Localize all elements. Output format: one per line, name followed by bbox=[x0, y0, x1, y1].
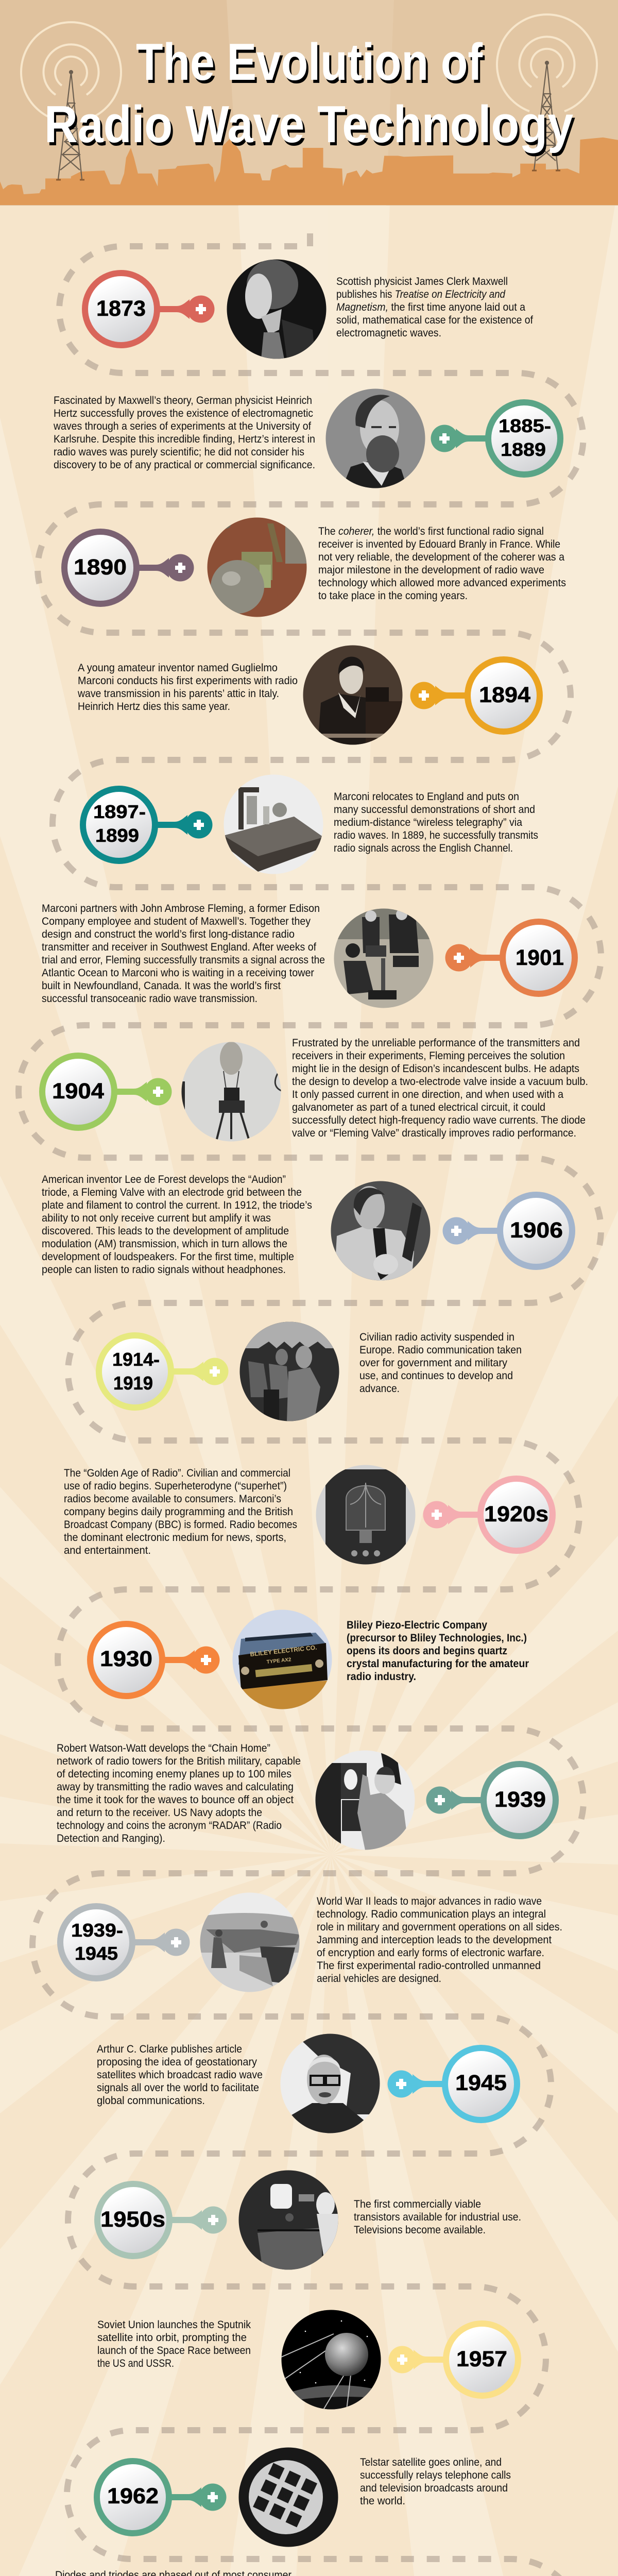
description: triode, a Fleming Valve with an electrode grid between the bbox=[42, 1187, 302, 1198]
skyline bbox=[0, 138, 618, 205]
description: the dominant electronic medium for news, sports, bbox=[64, 1532, 286, 1544]
year badge 1904 bbox=[42, 1056, 172, 1128]
photo: coherer bbox=[207, 517, 308, 617]
description: A young amateur inventor named Guglielmo bbox=[78, 662, 278, 674]
description: valve or “Fleming Valve” drastically improves radio performance. bbox=[292, 1127, 576, 1139]
year badge 1939-1945 bbox=[60, 1906, 190, 1978]
description: Magnetism, the first time anyone laid out a bbox=[336, 301, 525, 313]
description bbox=[354, 2198, 521, 2236]
description: people can listen to radio signals without headphones. bbox=[42, 1264, 286, 1276]
description: Marconi conducts his first experiments with radio bbox=[78, 675, 298, 687]
description: transistors available for industrial use. bbox=[354, 2211, 521, 2223]
panel: 1894 bbox=[77, 645, 540, 745]
icon: right radio tower bbox=[532, 61, 560, 171]
description: Europe. Radio communication taken bbox=[359, 1344, 522, 1356]
panel: 1901 bbox=[42, 903, 575, 1008]
description: radio waves. In 1889, he successfully transmits bbox=[334, 829, 538, 841]
year badge 1906: 1906 bbox=[510, 1218, 563, 1243]
description: receivers in their experiments, Fleming perceives the solution bbox=[292, 1050, 565, 1062]
panel: 1939-1945 bbox=[60, 1892, 562, 1992]
description bbox=[336, 276, 533, 339]
description: wave transmission in his parents’ attic in Italy. bbox=[77, 688, 279, 700]
description: Atlantic Ocean to Marconi who is waiting in a receiving tower bbox=[42, 967, 314, 979]
year badge 1885-1889 bbox=[431, 402, 560, 474]
description bbox=[77, 662, 298, 713]
description: American inventor Lee de Forest develops the “Audion” bbox=[42, 1174, 286, 1185]
description: and television broadcasts around bbox=[360, 2482, 508, 2494]
description: launch of the Space Race between bbox=[97, 2345, 251, 2357]
description: Broadcast Company (BBC) is formed. Radio becomes bbox=[64, 1519, 297, 1531]
description: technology which allowed more advanced experiments bbox=[318, 577, 566, 589]
panel: 1890 bbox=[64, 517, 566, 617]
panel: 1950s bbox=[97, 2170, 521, 2270]
year badge 1962 bbox=[97, 2461, 227, 2533]
panel: 1914-1919 bbox=[99, 1321, 522, 1421]
photo: 1920s cabinet radio bbox=[316, 1465, 416, 1567]
year badge 1950s bbox=[97, 2184, 227, 2256]
description: Hertz successfully proves the existence of electromagnetic bbox=[54, 408, 313, 419]
description: proposing the idea of geostationary bbox=[97, 2056, 257, 2068]
description: discovery to be of any practical or commercial significance. bbox=[54, 459, 315, 471]
description: use, and continues to develop and bbox=[359, 1370, 513, 1382]
description: The “Golden Age of Radio”. Civilian and commercial bbox=[64, 1467, 290, 1479]
year badge 1950s: 1950s bbox=[100, 2207, 165, 2232]
year badge 1939: 1939 bbox=[494, 1787, 546, 1812]
description: transmitter and receiver in Southwest England. After weeks of bbox=[42, 941, 316, 953]
photo: Fleming valve bbox=[181, 1042, 281, 1142]
description: Detection and Ranging). bbox=[57, 1833, 165, 1844]
description: ability to not only receive current but amplify it was bbox=[42, 1212, 271, 1224]
photo: Marconi and Fleming's team bbox=[334, 908, 434, 1008]
year badge 1890: 1890 bbox=[74, 555, 127, 580]
description: Fascinated by Maxwell’s theory, German physicist Heinrich bbox=[54, 395, 312, 406]
description: the US and USSR. bbox=[97, 2358, 174, 2369]
photo: Bliley crystal holder: BLILEY ELECTRIC CO. bbox=[250, 1643, 317, 1658]
description: satellites which broadcast radio wave bbox=[97, 2069, 263, 2081]
photo: Heinrich Hertz bbox=[325, 388, 425, 488]
year badge 1914-1919: 1914- bbox=[112, 1349, 160, 1370]
description: Jamming and interception leads to the development bbox=[317, 1934, 552, 1946]
description: successfully relays telephone calls bbox=[360, 2469, 511, 2481]
description: modulation (AM) transmission, which in turn allows the bbox=[42, 1238, 287, 1250]
description: away by transmitting the radio waves and calculating bbox=[57, 1781, 294, 1793]
description: radio industry. bbox=[347, 1671, 416, 1683]
description bbox=[57, 1742, 301, 1844]
description: the design to develop a two-electrode valve inside a vacuum bulb. bbox=[292, 1076, 588, 1088]
description: It only passed current in one direction, and when used with a bbox=[292, 1089, 563, 1100]
description: Company employee and student of Maxwell’s. Together they bbox=[42, 916, 311, 927]
description: design and construct the world’s first long-distance radio bbox=[42, 928, 295, 940]
description: technology. Radio communication plays an integral bbox=[317, 1908, 546, 1920]
panel: 1897-1899 bbox=[83, 774, 538, 874]
year badge 1962: 1962 bbox=[107, 2484, 159, 2509]
year badge 1873: 1873 bbox=[96, 296, 146, 321]
year badge 1939-1945: 1945 bbox=[75, 1943, 118, 1964]
description: many successful demonstrations of short and bbox=[334, 804, 535, 816]
year badge 1945: 1945 bbox=[455, 2071, 507, 2095]
description: and entertainment. bbox=[64, 1545, 151, 1556]
year badge 1904: 1904 bbox=[52, 1079, 104, 1104]
description bbox=[42, 1174, 312, 1276]
photo: James Clerk Maxwell bbox=[227, 259, 327, 359]
title: The Evolution of bbox=[136, 33, 483, 91]
year badge 1885-1889: 1885- bbox=[499, 415, 551, 436]
photo: wartime radio operators bbox=[239, 1321, 339, 1421]
description: electromagnetic waves. bbox=[336, 327, 441, 339]
panel: 1957 bbox=[97, 2310, 518, 2410]
description: The first experimental radio-controlled unmanned bbox=[317, 1960, 541, 1972]
year badge 1897-1899: 1897- bbox=[93, 801, 146, 822]
description: medium-distance “wireless telegraphy” via bbox=[334, 817, 522, 828]
description: Frustrated by the unreliable performance of the transmitters and bbox=[292, 1037, 580, 1049]
year badge 1873 bbox=[85, 273, 214, 345]
description: signals all over the world to facilitate bbox=[97, 2082, 259, 2094]
year badge 1914-1919 bbox=[99, 1335, 229, 1408]
icon: left radio waves bbox=[21, 22, 121, 119]
description: technology and coins the acronym “RADAR” (Radio bbox=[57, 1820, 282, 1832]
description bbox=[97, 2043, 263, 2107]
photo: Lee de Forest bbox=[331, 1181, 431, 1281]
description bbox=[317, 1895, 562, 1985]
description: role in military and government operations on all sides. bbox=[317, 1921, 562, 1933]
panel: 1939 bbox=[57, 1742, 556, 1851]
description: global communications. bbox=[97, 2095, 205, 2107]
description: solid, mathematical case for the existence of bbox=[336, 314, 533, 326]
panel: 1920s bbox=[64, 1465, 553, 1567]
year badge 1957 bbox=[388, 2324, 518, 2396]
description: Marconi partners with John Ambrose Fleming, a former Edison bbox=[42, 903, 320, 914]
panel: 1885-1889 bbox=[53, 388, 560, 488]
description: Scottish physicist James Clerk Maxwell bbox=[336, 276, 508, 287]
description: Marconi relocates to England and puts on bbox=[334, 791, 519, 803]
description: satellite into orbit, prompting the bbox=[97, 2332, 247, 2344]
description: radios become available to consumers. Marconi’s bbox=[64, 1493, 281, 1505]
description bbox=[360, 2456, 511, 2507]
description bbox=[292, 1037, 588, 1139]
description bbox=[318, 526, 566, 602]
icon: left radio tower bbox=[56, 71, 84, 180]
description: receiver is invented by Edouard Branly in France. While bbox=[318, 538, 560, 550]
description: radio signals across the English Channel. bbox=[334, 842, 513, 854]
description: Telstar satellite goes online, and bbox=[360, 2456, 502, 2468]
title: The Evolution of bbox=[138, 37, 485, 94]
year badge 1920s bbox=[423, 1479, 553, 1551]
year badge 1897-1899 bbox=[83, 789, 212, 861]
description bbox=[347, 1619, 529, 1683]
description: trial and error, Fleming successfully transmits a signal across the bbox=[42, 954, 325, 966]
description: The coherer, the world’s first functional radio signal bbox=[318, 526, 544, 537]
description: successfully detect high-frequency radio wave currents. The diode bbox=[292, 1114, 586, 1126]
panel: 1945 bbox=[97, 2033, 517, 2133]
description: successful transoceanic radio wave transmission. bbox=[42, 993, 258, 1005]
description: opens its doors and begins quartz bbox=[347, 1645, 507, 1657]
description: Soviet Union launches the Sputnik bbox=[97, 2319, 251, 2331]
photo: Arthur C. Clarke bbox=[280, 2033, 380, 2133]
photo: radio-controlled drone bbox=[200, 1892, 300, 1992]
year badge 1939 bbox=[426, 1764, 556, 1836]
description: Heinrich Hertz dies this same year. bbox=[78, 701, 230, 713]
description: Arthur C. Clarke publishes article bbox=[97, 2043, 242, 2055]
year badge 1906 bbox=[443, 1195, 572, 1267]
header: skyline and towers bbox=[0, 0, 618, 206]
year badge 1901: 1901 bbox=[516, 945, 564, 970]
description: the time it took for the waves to bounce off an object bbox=[57, 1794, 294, 1806]
year badge 1939-1945: 1939- bbox=[71, 1920, 123, 1941]
panel: 1930 bbox=[90, 1609, 529, 1709]
description: of detecting incoming enemy planes up to 100 miles bbox=[57, 1768, 291, 1780]
description: crystal manufacturing for the amateur bbox=[347, 1658, 529, 1670]
description: use of radio begins. Superheterodyne (“superhet”) bbox=[64, 1480, 287, 1492]
description: Karlsruhe. Despite this incredible finding, Hertz’s interest in bbox=[54, 433, 315, 445]
description: plate and filament to control the current. In 1912, the triode’s bbox=[42, 1199, 312, 1211]
year badge 1894: 1894 bbox=[479, 683, 530, 707]
description: advance. bbox=[359, 1383, 400, 1395]
description: (precursor to Bliley Technologies, Inc.) bbox=[347, 1632, 527, 1644]
description: over for government and military bbox=[359, 1357, 507, 1369]
description bbox=[334, 791, 538, 854]
panel: 1873 bbox=[85, 259, 533, 359]
photo: Marconi wireless apparatus bbox=[224, 774, 323, 874]
description bbox=[359, 1331, 522, 1395]
description bbox=[97, 2319, 251, 2369]
year badge 1930: 1930 bbox=[100, 1647, 152, 1671]
description: and return to the receiver. US Navy adopts the bbox=[57, 1807, 262, 1819]
description: discovered. This leads to the development of amplitude bbox=[42, 1225, 289, 1237]
year badge 1957: 1957 bbox=[456, 2347, 507, 2371]
description: network of radio towers for the British military, capable bbox=[57, 1755, 301, 1767]
description: might lie in the design of Edison’s incandescent bulbs. He adapts bbox=[292, 1063, 579, 1075]
description: company begins daily programming and the British bbox=[64, 1506, 293, 1518]
photo: Guglielmo Marconi bbox=[303, 645, 404, 745]
year badge 1945 bbox=[387, 2048, 517, 2120]
description: publishes his Treatise on Electricity and bbox=[336, 289, 506, 300]
description: World War II leads to major advances in radio wave bbox=[317, 1895, 542, 1907]
panel: 1904 bbox=[42, 1037, 588, 1142]
year badge 1897-1899: 1899 bbox=[95, 825, 139, 846]
year badge 1885-1889: 1889 bbox=[501, 439, 546, 460]
description: The first commercially viable bbox=[354, 2198, 481, 2210]
panel: 1962 bbox=[97, 2447, 511, 2547]
description: Televisions become available. bbox=[354, 2224, 486, 2236]
description: radio waves was purely scientific; he did not consider his bbox=[54, 446, 304, 458]
description: not very reliable, the development of the coherer was a bbox=[318, 551, 564, 563]
description: to take place in the coming years. bbox=[318, 590, 468, 602]
photo: Sputnik bbox=[281, 2310, 381, 2410]
photo: Telstar satellite bbox=[238, 2447, 338, 2547]
photo: Bliley crystal holder: TYPE AX2 bbox=[266, 1657, 291, 1665]
description: Robert Watson-Watt develops the “Chain Home” bbox=[57, 1742, 270, 1754]
description: Bliley Piezo-Electric Company bbox=[347, 1619, 487, 1631]
description bbox=[64, 1467, 297, 1556]
title bbox=[44, 33, 575, 157]
description: waves through a series of experiments at the University of bbox=[53, 420, 311, 432]
photo: Robert Watson-Watt bbox=[315, 1750, 415, 1851]
panel: 1906 bbox=[42, 1174, 572, 1281]
year badge 1894 bbox=[410, 659, 540, 732]
year badge 1920s: 1920s bbox=[484, 1502, 548, 1527]
description: development of loudspeakers. For the first time, multiple bbox=[42, 1251, 294, 1263]
year badge 1914-1919: 1919 bbox=[113, 1372, 153, 1394]
year badge 1901 bbox=[445, 922, 575, 994]
year badge 1930 bbox=[90, 1624, 219, 1696]
description: Civilian radio activity suspended in bbox=[359, 1331, 514, 1343]
description bbox=[53, 395, 315, 471]
icon: right radio waves bbox=[497, 14, 597, 111]
photo: Bliley crystal holder bbox=[232, 1609, 332, 1709]
description: galvanometer as part of a tuned electrical circuit, it could bbox=[292, 1101, 545, 1113]
description: built in Newfoundland, Canada. It was the world’s first bbox=[42, 980, 281, 992]
description: aerial vehicles are designed. bbox=[317, 1973, 441, 1985]
description: the world. bbox=[360, 2495, 405, 2507]
description bbox=[42, 903, 325, 1005]
description: major milestone in the development of radio wave bbox=[318, 564, 544, 576]
year badge 1890 bbox=[64, 532, 194, 604]
photo: 1950s television bbox=[238, 2170, 338, 2270]
description: of encryption and early forms of electronic warfare. bbox=[317, 1947, 544, 1959]
